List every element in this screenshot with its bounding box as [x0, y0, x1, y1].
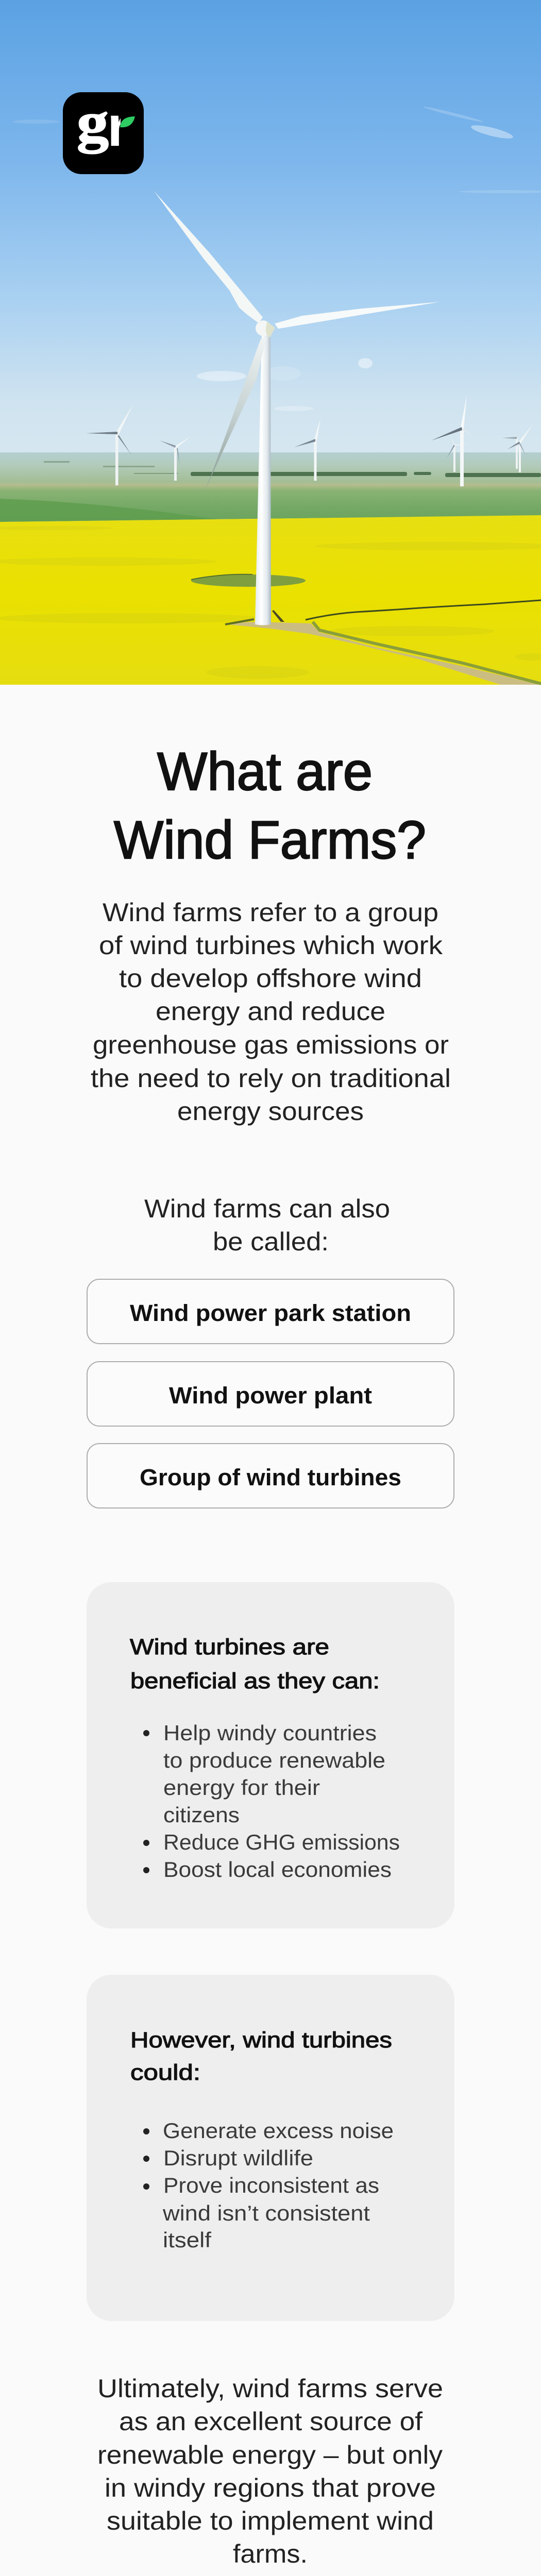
- distant turbine F: [508, 425, 532, 472]
- sky: [0, 0, 541, 456]
- hub: [256, 320, 271, 336]
- tower: [255, 335, 271, 625]
- logo letters gr: g: [77, 91, 109, 154]
- drawbacks heading: could:: [130, 2060, 200, 2085]
- distant fields: [0, 452, 541, 522]
- benefits list: Boost local economies: [163, 1857, 392, 1882]
- title: [114, 742, 426, 870]
- dirt road: [227, 622, 539, 685]
- benefits list: Help windy countries: [163, 1721, 377, 1745]
- name button: group of wind turbines: Group of wind turbines: [140, 1464, 401, 1490]
- drawbacks list: Generate excess noise: [163, 2119, 394, 2143]
- nacelle: [266, 321, 275, 337]
- name button: wind power plant: Wind power plant: [169, 1382, 372, 1409]
- title: What are: [157, 742, 373, 802]
- distant turbine C: [294, 418, 326, 481]
- panel: benefits: [87, 1582, 454, 1928]
- benefits list: energy for their: [163, 1775, 320, 1800]
- field edge lines: [306, 600, 541, 620]
- title: Wind Farms?: [114, 810, 426, 870]
- benefits list: [143, 1721, 400, 1882]
- green patch around pond: [191, 574, 306, 587]
- drawbacks list: [143, 2119, 394, 2252]
- drawbacks list: Prove inconsistent as: [163, 2173, 379, 2197]
- logo leaf backing: [121, 111, 138, 137]
- tower guy shadow: [272, 610, 284, 622]
- benefits list: to produce renewable: [163, 1748, 385, 1772]
- hero photo: wind turbines in a yellow field: [0, 0, 541, 685]
- subheading: alternative names: [144, 1194, 390, 1256]
- conclusion paragraph: farms.: [233, 2539, 308, 2568]
- main turbine: [154, 191, 440, 625]
- benefits heading: [130, 1635, 380, 1693]
- intro paragraph: [91, 898, 451, 1126]
- intro paragraph: energy and reduce: [156, 997, 385, 1026]
- drawbacks list: wind isn’t consistent: [162, 2201, 370, 2225]
- distant turbine G: [502, 437, 518, 469]
- benefits heading: Wind turbines are: [130, 1635, 329, 1659]
- yellow field: [0, 515, 541, 685]
- intro paragraph: of wind turbines which work: [99, 931, 443, 960]
- conclusion paragraph: as an excellent source of: [119, 2407, 422, 2436]
- drawbacks heading: [130, 2028, 392, 2085]
- drawbacks heading: However, wind turbines: [130, 2028, 392, 2053]
- clouds: [13, 106, 541, 411]
- intro paragraph: the need to rely on traditional: [91, 1064, 451, 1093]
- upper-left blade: [154, 191, 263, 323]
- name button: group of wind turbines: [87, 1444, 454, 1508]
- logo leaf: [120, 116, 135, 127]
- name button: wind power park station: Wind power park station: [130, 1300, 411, 1326]
- intro paragraph: Wind farms refer to a group: [103, 898, 438, 927]
- distant turbine A: [86, 405, 132, 485]
- tree line: [44, 461, 541, 477]
- intro paragraph: energy sources: [177, 1097, 364, 1126]
- drawbacks list: itself: [163, 2228, 211, 2252]
- darker green field: [0, 499, 216, 522]
- benefits list: Reduce GHG emissions: [163, 1830, 400, 1854]
- name button: wind power park station: [87, 1279, 454, 1344]
- name button: wind power plant: [87, 1362, 454, 1426]
- conclusion paragraph: Ultimately, wind farms serve: [97, 2374, 443, 2403]
- distant turbine B: [160, 436, 191, 481]
- intro paragraph: to develop offshore wind: [119, 964, 422, 993]
- benefits list: citizens: [163, 1803, 240, 1827]
- conclusion paragraph: in windy regions that prove: [105, 2473, 436, 2502]
- conclusion paragraph: renewable energy – but only: [97, 2441, 443, 2469]
- panel: drawbacks: [87, 1975, 454, 2321]
- right blade: [275, 302, 440, 329]
- lower blade: [204, 338, 266, 493]
- app logo badge: r: [107, 95, 129, 158]
- subheading: alternative names: Wind farms can also: [144, 1194, 390, 1223]
- benefits heading: beneficial as they can:: [130, 1669, 380, 1693]
- distant turbines: [86, 395, 532, 486]
- subheading: alternative names: be called:: [213, 1227, 329, 1256]
- conclusion paragraph: [97, 2374, 443, 2568]
- distant turbine D: [431, 395, 472, 486]
- conclusion paragraph: suitable to implement wind: [107, 2506, 434, 2535]
- app logo badge: [63, 91, 144, 174]
- intro paragraph: greenhouse gas emissions or: [93, 1030, 449, 1059]
- field shading: [0, 526, 541, 679]
- distant turbine E: [447, 436, 469, 472]
- drawbacks list: Disrupt wildlife: [163, 2146, 313, 2170]
